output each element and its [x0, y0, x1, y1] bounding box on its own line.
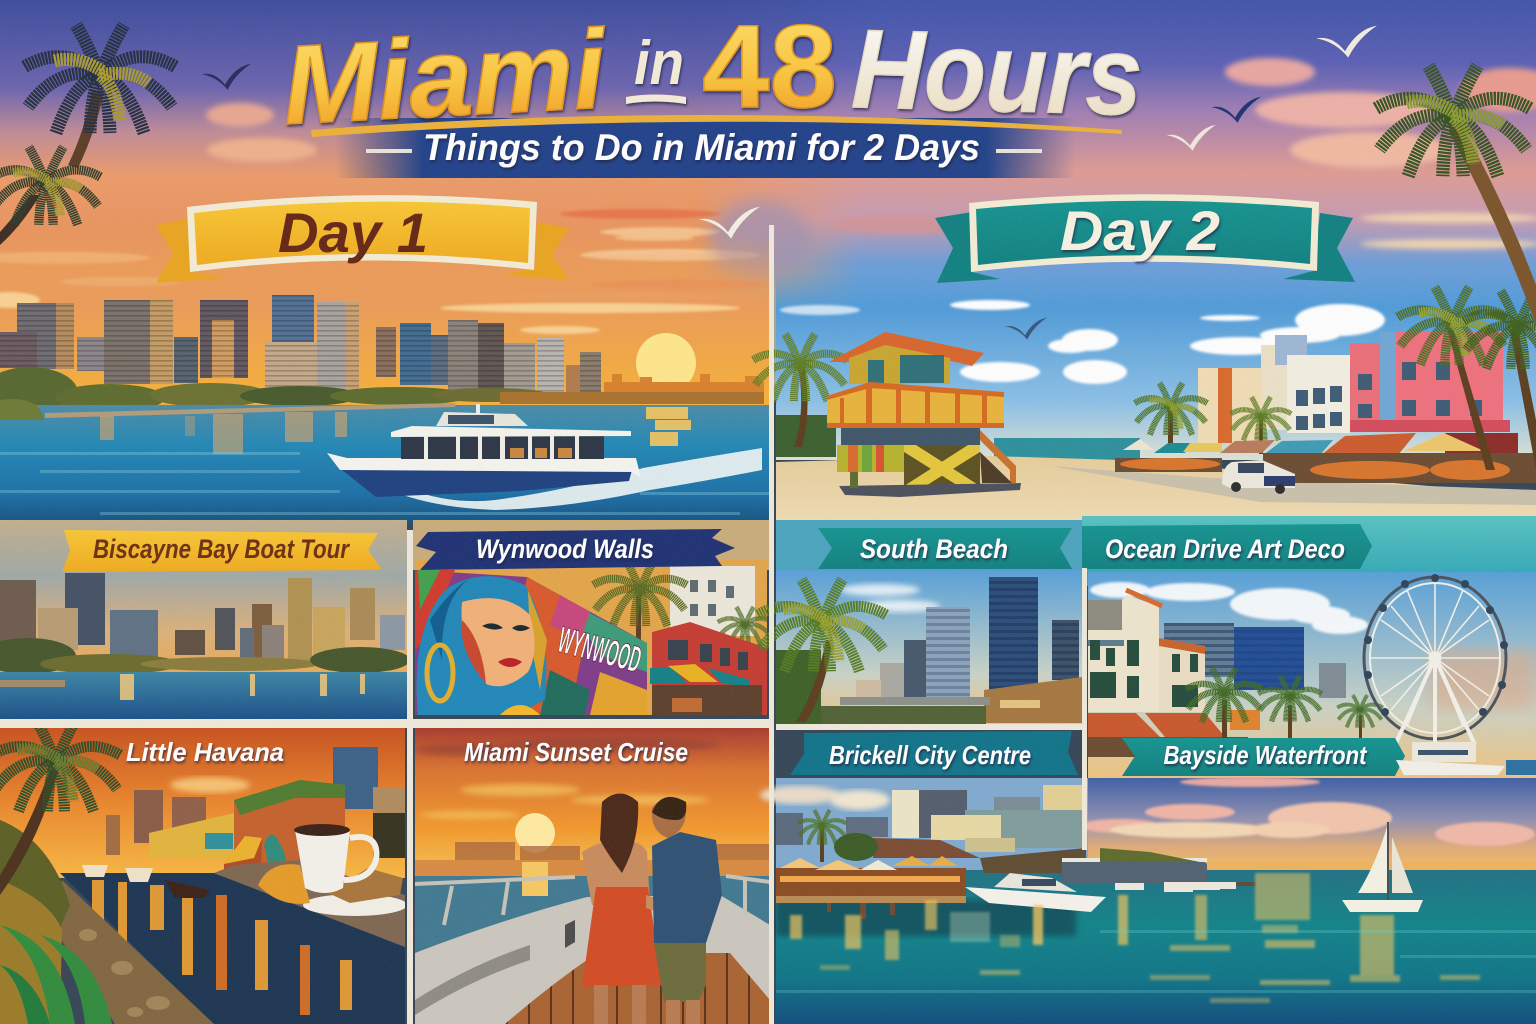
- promenade: [214, 860, 405, 947]
- awnings and cafes: [1115, 433, 1536, 483]
- face: [462, 598, 535, 686]
- icon: ferris wheel: [1364, 574, 1508, 745]
- scene: Bayside Waterfront: [1088, 572, 1536, 780]
- text: Miami Sunset Cruise: Miami Sunset Cruise: [464, 737, 688, 767]
- scene: Little Havana: [0, 720, 407, 1024]
- water reflections: [790, 873, 1480, 1003]
- icon: palm: [591, 566, 767, 646]
- buildings: [776, 785, 1082, 852]
- banner: Ocean Drive Art Deco: [1082, 524, 1372, 569]
- banner: Brickell City Centre: Brickell City Centre: [829, 740, 1031, 770]
- skyline buildings: [0, 295, 601, 393]
- small boats: [1115, 882, 1236, 892]
- teal band behind labels: [776, 516, 1536, 586]
- icon: white car: [1222, 460, 1295, 494]
- earring: [427, 645, 453, 701]
- title: Miami: [280, 6, 611, 148]
- scene: Wynwood mural: [413, 520, 772, 717]
- awnings: [1088, 713, 1225, 737]
- pavilions: [980, 848, 1086, 873]
- icon: palms bayside: [1186, 668, 1383, 741]
- banner: Day 1: [156, 195, 569, 283]
- boats: [82, 865, 153, 882]
- banner: Biscayne Bay Boat Tour: [62, 530, 382, 572]
- scene: Wynwood mural: WYNWOOD: [554, 619, 646, 680]
- stone wall: [55, 880, 214, 1024]
- icon: lifeguard tower: [827, 332, 1021, 497]
- building: red shop: [652, 622, 767, 715]
- icon: palm marina: [798, 810, 878, 862]
- panel: Day 1: [0, 235, 772, 1024]
- icon: palm left: [753, 334, 847, 457]
- icon: yacht: [965, 873, 1106, 912]
- banner: Biscayne Bay Boat Tour: Biscayne Bay Boat Tour: [93, 534, 350, 564]
- palm: corner right: [1375, 66, 1536, 325]
- banner: Day 1: Day 1: [278, 201, 428, 264]
- banner: Day 2: Day 2: [1060, 199, 1220, 262]
- mural wall: [415, 570, 647, 715]
- text: Little Havana: Little Havana: [126, 737, 284, 767]
- scene: Biscayne Bay boat tour: [0, 235, 770, 523]
- palms: corner left: [0, 25, 176, 245]
- banner: Bayside Waterfront: Bayside Waterfront: [1164, 740, 1368, 770]
- water: [776, 870, 1536, 1024]
- trees: [0, 367, 550, 419]
- person: woman: [582, 794, 708, 1024]
- deck and hull: [415, 895, 770, 1024]
- deck and umbrellas: [776, 868, 966, 898]
- icon: tour boat bayside: [1396, 742, 1536, 775]
- banner: Wynwood Walls: [416, 529, 735, 570]
- banner: South Beach: [818, 528, 1072, 569]
- sea: [994, 438, 1140, 460]
- title: in: [634, 29, 684, 98]
- title: [280, 1, 1144, 148]
- icon: sun: [636, 333, 696, 393]
- icon: tour boat: [327, 404, 641, 497]
- art deco buildings: [1198, 332, 1510, 443]
- banner: Brickell City Centre: [790, 731, 1078, 775]
- panel dividers: [0, 225, 1087, 1024]
- icon: coffee and plate: [258, 824, 407, 916]
- background: sky: [0, 0, 1536, 400]
- banner: South Beach: South Beach: [860, 534, 1008, 564]
- icon: bird: [1005, 318, 1047, 340]
- banner: Bayside Waterfront: [1122, 738, 1405, 776]
- icon: sun: [515, 813, 555, 853]
- scene: Miami Sunset Cruise: [415, 728, 770, 1024]
- icon: sailboat: [1342, 822, 1423, 912]
- banner: Ocean Drive Art Deco: Ocean Drive Art Deco: [1105, 534, 1345, 564]
- hair: [417, 576, 546, 717]
- subtitle: Things to Do in Miami for 2 Days: [423, 127, 980, 168]
- icon: wake: [400, 448, 762, 510]
- greenery: [0, 820, 70, 926]
- banner: Day 2: [935, 194, 1355, 283]
- railing: [415, 876, 770, 925]
- sand: [776, 456, 1536, 522]
- title: Hours: [850, 6, 1144, 139]
- scene: Brickell City Centre: [757, 570, 1082, 730]
- water: [60, 873, 405, 1024]
- icon: palm mid: [1135, 383, 1207, 452]
- icon: palms right: [1397, 287, 1536, 470]
- scene: South Beach and Ocean Drive: [753, 270, 1536, 522]
- scene: Biscayne skyline: [0, 520, 410, 719]
- birds: [202, 26, 1377, 239]
- person: man: [652, 797, 722, 1024]
- scene: bottom marina: [760, 777, 1536, 1024]
- subtitle band: [335, 118, 1075, 178]
- icon: palm tree: [0, 720, 121, 895]
- icon: palm small: [1231, 397, 1291, 454]
- banner: Wynwood Walls: Wynwood Walls: [476, 534, 654, 564]
- title: 48: [702, 1, 837, 133]
